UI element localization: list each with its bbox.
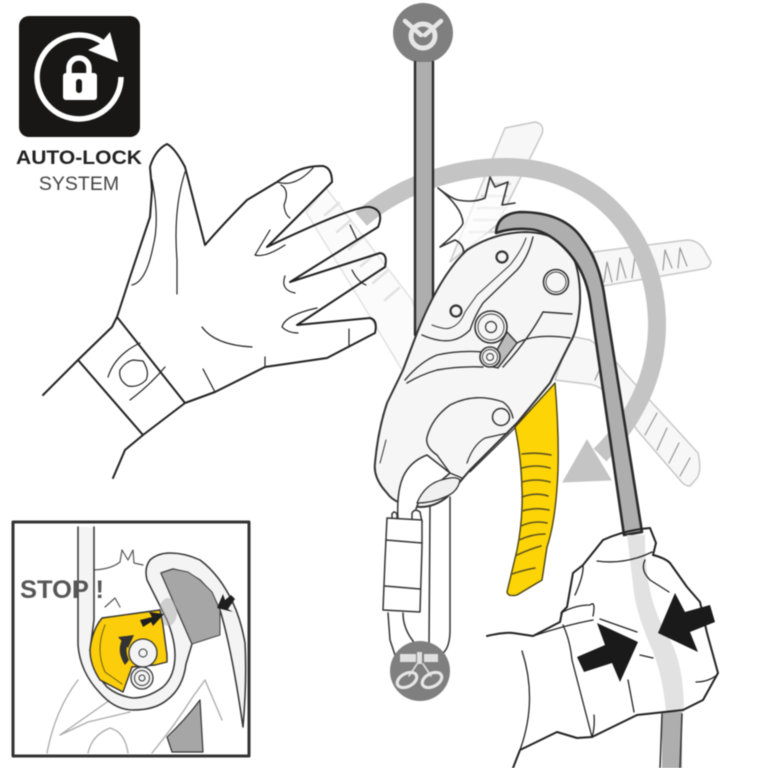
roller xyxy=(480,347,500,367)
inset stop text: STOP ! xyxy=(20,576,104,604)
inset cam arrow xyxy=(140,612,164,627)
ghost handle: lower right xyxy=(555,336,700,486)
ghost handle: right xyxy=(593,240,711,286)
heading: auto-lock system xyxy=(16,147,142,195)
impact spark xyxy=(438,177,515,258)
locking sleeve xyxy=(383,518,422,612)
open hand glove xyxy=(43,144,386,478)
belay device body xyxy=(375,232,580,507)
rotation arc arrow xyxy=(361,167,657,482)
ghost handle positions xyxy=(306,122,711,486)
badge background xyxy=(19,16,140,137)
inset pinch arrow xyxy=(217,594,235,612)
yellow brake handle xyxy=(507,383,558,596)
arrow: squeeze from left xyxy=(577,623,638,682)
inset rope loop xyxy=(78,527,246,727)
pivot xyxy=(475,311,507,343)
icon: auto-lock badge xyxy=(19,16,140,137)
lower loop xyxy=(388,613,418,655)
inset pivot roller xyxy=(129,639,157,667)
sleeve lugs xyxy=(392,510,422,522)
icon: harness at bottom xyxy=(390,641,450,701)
inset cam inner line xyxy=(100,625,122,684)
carabiner top loop xyxy=(398,455,450,520)
inset yellow cam xyxy=(90,610,167,692)
carabiner back strands xyxy=(429,497,450,654)
ghost handle: left xyxy=(306,188,425,375)
carabiner front xyxy=(383,455,460,655)
inset pressure shadow xyxy=(159,598,177,626)
inset rotation arrow xyxy=(118,635,134,665)
inset lever xyxy=(167,700,203,752)
cam slot xyxy=(488,332,517,368)
rotating ring xyxy=(37,35,121,119)
glove outline xyxy=(43,144,386,478)
system label: SYSTEM xyxy=(39,173,119,195)
lower lobe xyxy=(427,398,513,478)
wrist strap xyxy=(108,343,165,400)
auto-lock label: AUTO-LOCK xyxy=(16,147,142,169)
rope below hand xyxy=(660,712,682,768)
inset device outline xyxy=(47,680,222,753)
arc xyxy=(361,167,657,455)
latch xyxy=(417,478,460,503)
inset second roller xyxy=(131,667,153,689)
side plate lines xyxy=(422,237,533,341)
padlock xyxy=(63,58,97,100)
rope: brake strand xyxy=(496,212,684,768)
rope: vertical anchor strand xyxy=(415,62,433,337)
inset frame xyxy=(13,522,249,756)
arrow: squeeze from right xyxy=(658,593,715,652)
inset gray rope section xyxy=(161,569,220,644)
brake hand glove xyxy=(487,528,718,768)
device outline xyxy=(375,232,580,507)
glove outline xyxy=(487,528,718,768)
rope through hand xyxy=(627,535,684,712)
inset panel: stop detail xyxy=(13,522,249,756)
handle ribs xyxy=(512,453,551,574)
inset spark xyxy=(90,550,143,607)
ghost handle: upper xyxy=(450,122,543,262)
screws xyxy=(496,252,508,262)
icon: top anchor xyxy=(393,3,453,63)
glove creases xyxy=(520,552,717,750)
ring arrowhead xyxy=(88,32,118,62)
arrow head xyxy=(563,440,611,482)
glove details xyxy=(132,168,366,392)
